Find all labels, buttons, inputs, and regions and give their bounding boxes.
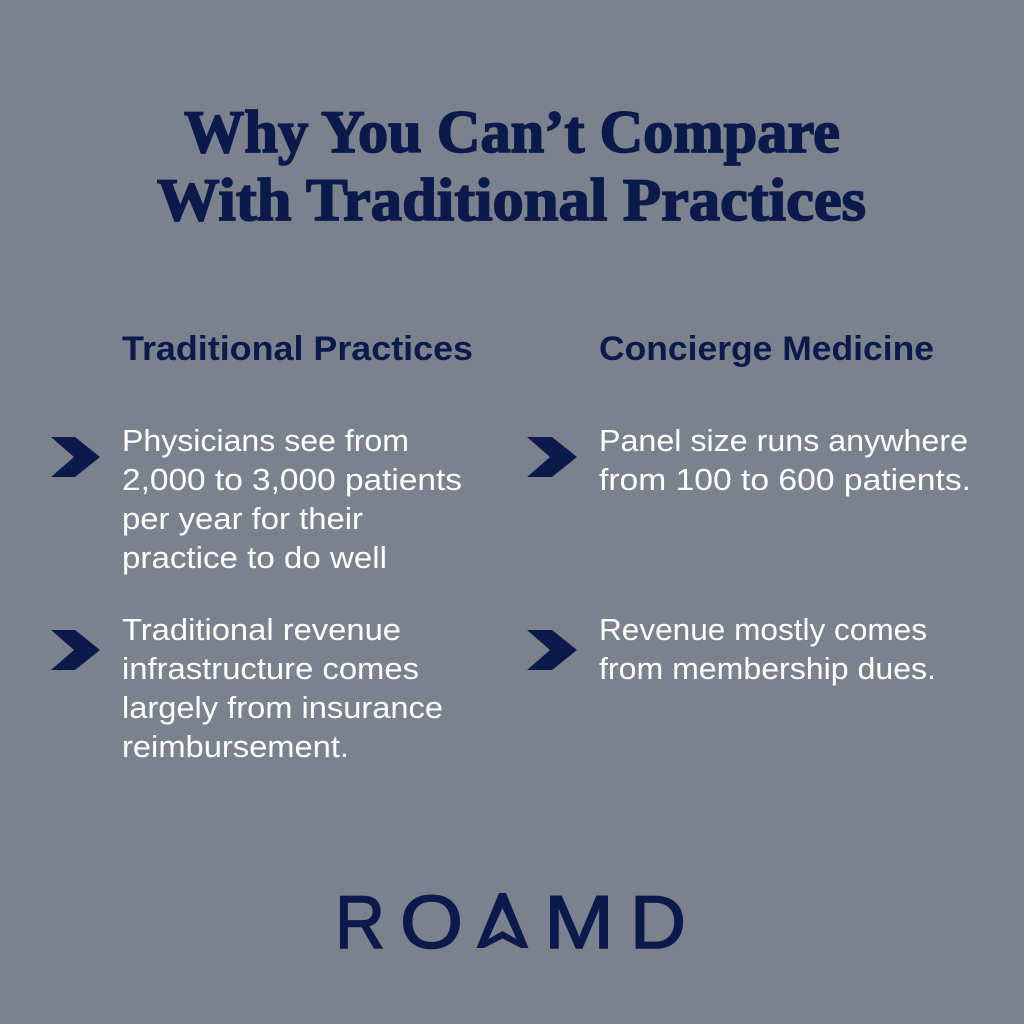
title: With Traditional Practices <box>157 167 866 233</box>
logo: ROAMD: O <box>400 880 463 964</box>
text: traditional revenue: infrastructure comes <box>122 651 419 686</box>
logo: ROAMD: D <box>630 880 686 964</box>
text: traditional patients <box>122 423 462 575</box>
text: concierge revenue <box>599 612 936 686</box>
text: concierge patients <box>599 423 971 497</box>
heading: concierge medicine: Concierge Medicine <box>599 330 934 368</box>
title: Why You Can’t Compare <box>184 99 840 165</box>
text: traditional patients: Physicians see from <box>122 423 409 458</box>
text: concierge patients: Panel size runs anywhere <box>599 423 968 458</box>
text: traditional revenue <box>122 612 443 764</box>
text: traditional revenue: largely from insurance <box>122 690 443 725</box>
icon: chevron concierge revenue <box>527 630 577 670</box>
icon: chevron concierge patients <box>527 437 577 477</box>
heading: traditional practices: Traditional Practices <box>122 330 473 368</box>
logo: ROAMD: M <box>544 880 614 964</box>
text: traditional revenue: Traditional revenue <box>122 612 401 647</box>
text: concierge revenue: Revenue mostly comes <box>599 612 927 647</box>
icon: chevron traditional revenue <box>51 630 100 670</box>
text: traditional patients: per year for their <box>122 501 363 536</box>
text: concierge patients: from 100 to 600 patients. <box>599 462 971 497</box>
icon: chevron traditional patients <box>51 437 100 477</box>
text: traditional patients: practice to do well <box>122 540 387 575</box>
text: traditional patients: 2,000 to 3,000 patients <box>122 462 462 497</box>
icon: navigation arrow letter A <box>476 893 528 948</box>
text: concierge revenue: from membership dues. <box>599 651 936 686</box>
text: traditional revenue: reimbursement. <box>122 729 349 764</box>
logo: ROAMD: R <box>335 880 385 964</box>
logo: ROAMD <box>335 880 686 964</box>
title <box>157 99 866 233</box>
